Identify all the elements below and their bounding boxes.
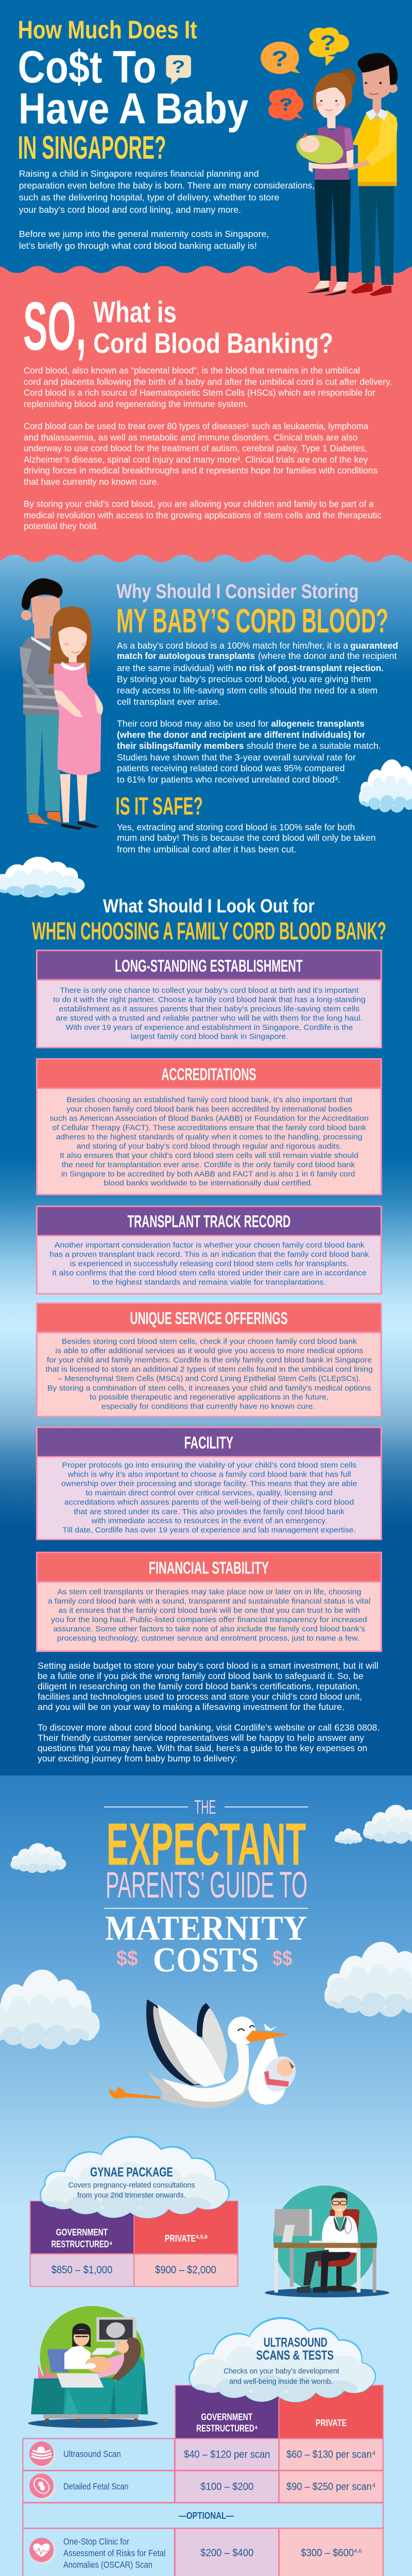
text block: transplants: are the same individual) with [117, 663, 233, 673]
table text: ultrasound: $40 – $120 per scan [184, 2448, 270, 2460]
panel: unique service offerings: to possible therapeutic and regenerative applications in the future, [90, 1393, 329, 1401]
panel: long-standing establishment [36, 950, 382, 1048]
table text: ultrasound: $60 – $130 per scan⁴ [286, 2448, 376, 2460]
panel: unique service offerings: especially for conditions that currently have no known cure. [101, 1402, 315, 1411]
panel: transplant track record [36, 1206, 382, 1295]
icon: orange question bubble: ? [271, 47, 288, 71]
table text: ultrasound: GOVERNMENT [201, 2412, 252, 2422]
panel: light blue wave gradient [0, 555, 412, 674]
title: expectant parents guide: THE [195, 1797, 216, 1818]
panel: long-standing establishment: to do it with the right partner. Choose a family cord blood bank that has a long-standing [53, 995, 366, 1004]
title [18, 16, 248, 166]
text block: transplants: match for autologous transplants [117, 651, 255, 661]
table text: ultrasound: $90 – $250 per scan⁴ [286, 2481, 376, 2492]
icon: cloud left [0, 857, 89, 899]
text block: transplants: Studies have shown that the 3-year overall survival rate for [117, 753, 356, 762]
icon: yellow question cloud [309, 27, 349, 66]
table text: ultrasound: —OPTIONAL— [179, 2510, 234, 2521]
title: expectant parents guide: COSTS [153, 1940, 259, 1979]
table text: ultrasound: 4,6 [354, 2548, 362, 2554]
text block: transplants: As a baby’s cord blood is a 100% match for him/her, it is a [117, 641, 348, 651]
panel: boxes long-standing, accreditations, track record [36, 950, 382, 1295]
icon: cloud [38, 2136, 237, 2221]
title: IN SINGAPORE? [18, 130, 166, 166]
table text: GOVERNMENT [56, 2227, 108, 2238]
intro text block: Raising a child in Singapore requires financial planning and [19, 169, 259, 179]
panel: unique service offerings: is able to offer additional services as it would give you access to more medical options [56, 1346, 363, 1355]
text block: closing paragraphs: and you will be on your way to making a lifesaving investment for the future. [38, 1702, 345, 1712]
title: expectant parents guide: $$ [116, 1946, 138, 1970]
table: ultrasound header and rows [22, 2385, 384, 2576]
panel: long-standing establishment: establishment as it assures parents that their baby’s precious life-saving stem cells [59, 1005, 359, 1013]
table text: 4,5,6 [196, 2234, 208, 2240]
panel: unique service offerings: – Mesenchymal Stem Cells (MSCs) and Cord Lining Epithelial Stem Cells (CLEpSCs). [58, 1374, 361, 1383]
text block: cord blood explanation: potential they hold. [24, 521, 98, 531]
panel: accreditations: the need for transplantation ever arise. Cordlife is the only family cord blood bank [62, 1160, 355, 1169]
intro text block [19, 169, 315, 251]
panel: unique service offerings: Besides storing cord blood stem cells, check if your chosen family cord blood bank [62, 1337, 357, 1346]
text block: closing paragraphs: your exciting journey from baby bump to delivery: [38, 1754, 237, 1764]
icon: beige question bubble [166, 55, 191, 84]
heading: ultrasound: and well-being inside the womb. [229, 2377, 333, 2385]
table text: ultrasound: One-Stop Clinic for [63, 2537, 129, 2547]
table text: $850 – $1,000 [51, 2264, 112, 2276]
text block: transplants: guaranteed [350, 641, 398, 651]
table text [51, 2227, 216, 2276]
panel: facility: Proper protocols go into ensuring the viability of your child’s cord blood stem cells [62, 1461, 356, 1469]
panel: accreditations [36, 1058, 382, 1195]
panel: financial stability: assurance. Some other factors to take note of also include the family cord blood bank’s [54, 1624, 365, 1633]
title: expectant parents guide: MATERNITY [105, 1909, 307, 1947]
panel: unique service offerings: By storing a combination of stem cells, it increases your child and family’s medical options [47, 1384, 371, 1392]
table text: $900 – $2,000 [155, 2264, 216, 2276]
text block: transplants: should there be a suitable match. [247, 741, 381, 751]
panel: accreditations: blood banks worldwide to be internationally dual certified. [104, 1179, 313, 1188]
illustration: ultrasound [28, 2306, 158, 2428]
panel: accreditations: in Singapore to be accredited by both AABB and FACT and is also 1 in 6 family cord [61, 1170, 355, 1178]
panel: accreditations: Besides choosing an established family cord blood bank, it’s also important that [66, 1095, 353, 1104]
text block: closing paragraphs [38, 1661, 380, 1764]
icon: beige question bubble: ? [171, 57, 185, 77]
panel: transplant track record: is experienced in successfully releasing cord blood stem cells for transplants. [70, 1259, 349, 1268]
icon: cloud [187, 2317, 384, 2405]
heading: what to look out for: What Should I Look Out for [103, 895, 315, 917]
panel: long-standing establishment: are stored with a trusted and reliable partner who will be with them for the long haul. [56, 1014, 363, 1022]
icon: clouds around title [0, 1805, 412, 2053]
icon: fetal scan [29, 2473, 55, 2500]
panel: financial stability [36, 1552, 382, 1652]
text block: transplants: allogeneic transplants [271, 719, 365, 729]
heading: ultrasound: ULTRASOUND [264, 2335, 328, 2350]
table text: ultrasound: $100 – $200 [200, 2481, 253, 2492]
text block: transplants: patients receiving related cord blood was 95% compared [117, 764, 345, 774]
panel: accreditations: such as American Association of Blood Banks (AABB) or Foundation for the Accreditation [49, 1114, 369, 1123]
section: why store cord blood [0, 578, 412, 945]
table text: ultrasound: Detailed Fetal Scan [63, 2482, 128, 2492]
text block: transplants: Their cord blood may also be used for [117, 719, 269, 729]
panel: facility [36, 1427, 382, 1540]
text block: cord blood explanation: that have currently no known cure. [24, 477, 159, 487]
panel: financial stability: FINANCIAL STABILITY [149, 1559, 269, 1578]
table text: ultrasound: $300 – $600 [301, 2547, 354, 2558]
panel: accreditations: your chosen family cord blood bank has been accredited by international bodies [66, 1105, 352, 1113]
text block: safety: Yes, extracting and storing cord blood is 100% safe for both [117, 822, 355, 833]
text block: safety: from the umbilical cord after it has been cut. [117, 844, 297, 855]
panel: gynae package [30, 2136, 238, 2287]
heading: why store [116, 581, 388, 640]
heading: So, what is cord blood banking [23, 288, 333, 364]
panel: transplant track record: Another important consideration factor is whether your chosen family cord blood bank [55, 1241, 365, 1249]
heading: what to look out for [32, 895, 386, 945]
heading: gynae: GYNAE PACKAGE [90, 2165, 173, 2180]
panel: accreditations: adheres to the highest standards of quality when it comes to the handling, processing [56, 1132, 363, 1141]
illustration: expecting couple [20, 578, 103, 830]
panel: facility: Till date, Cordlife has over 19 years of experience and lab management expertise. [62, 1526, 356, 1534]
panel: financial stability: a family cord blood bank with a sound, transparent and sustainable financial status is vital [48, 1597, 370, 1605]
text block: cord blood explanation [24, 366, 392, 531]
heading: ultrasound: Checks on your baby's development [224, 2367, 339, 2375]
panel: facility: ownership over their processing and storage facility. This means that they are able [61, 1479, 357, 1488]
panel: facility: accreditations which assures parents of the well-being of their child’s cord blood [64, 1498, 354, 1506]
heading: So, what is cord blood banking: SO, [23, 288, 86, 364]
panel: unique service offerings [36, 1302, 382, 1417]
panel: accreditations: of Cellular Therapy (FACT). These accreditations ensure that the family cord blood bank [53, 1123, 367, 1132]
text block: transplants: to 61% for patients who received unrelated cord blood³. [117, 775, 340, 785]
panel: financial stability: As stem cell transplants or therapies may take place now or later on in life, choosing [57, 1587, 362, 1596]
intro text block: let’s briefly go through what cord blood banking actually is! [19, 241, 257, 251]
panel: transplant track record: has a proven transplant track record. This is an indication that the family cord blood bank [49, 1250, 369, 1259]
panel: facility: which is why it’s also important to choose a family cord blood bank that has full [67, 1470, 351, 1479]
panel: accreditations: and storing of your baby’s cord blood through regular and rigorous audits. [76, 1142, 342, 1150]
icon: red question cloud [268, 88, 303, 121]
panel: financial stability: you for the long haul. Public-listed companies offer financial transparency for increased [51, 1615, 367, 1624]
panel: coral wave background [0, 266, 412, 568]
icon: yellow question cloud: ? [320, 31, 336, 55]
table text: ultrasound: Ultrasound Scan [63, 2449, 121, 2459]
icon: red question cloud: ? [279, 94, 293, 114]
title: expectant parents guide: $$ [272, 1946, 293, 1970]
intro text block: preparation even before the baby is born. There are many considerations, [19, 181, 315, 191]
panel: transplant track record: It also confirms that the cord blood stem cells stored under their care are in accordance [52, 1268, 367, 1277]
panel: facility: with immediate access to resources in the event of an emergency. [91, 1516, 327, 1525]
title: Have A Baby [19, 84, 248, 133]
title: Co$t To [18, 42, 157, 92]
table text: ultrasound [63, 2412, 376, 2576]
table text: PRIVATE [165, 2233, 196, 2244]
panel: long-standing establishment: largest family cord blood bank in Singapore. [131, 1032, 288, 1041]
title: How Much Does It [18, 16, 197, 44]
hero section [18, 16, 398, 329]
text block: safety [117, 822, 376, 855]
heading: gynae: Covers pregnancy-related consultations [68, 2181, 195, 2190]
panel: facility: to maintain direct control over critical services, quality, licensing and [85, 1488, 333, 1497]
illustration: woman holding baby [291, 69, 356, 295]
icon: orange question bubble [261, 42, 300, 74]
icon: cloud right [358, 759, 412, 815]
title: expectant parents guide [104, 1797, 308, 1979]
section: ultrasound scans and tests [22, 2306, 384, 2576]
text block: transplants: cell transplant ever arise. [117, 697, 221, 707]
panel: boxes unique services, facility, financial stability [36, 1302, 382, 1652]
intro text block: your baby’s cord blood and cord lining, and many more. [19, 205, 241, 215]
table text: ultrasound: $200 – $400 [200, 2547, 253, 2558]
panel: long-standing establishment: There is only one chance to collect your baby’s cord blood at birth and it’s important [60, 986, 359, 994]
panel: accreditations: It also ensures that your child’s cord blood stem cells will still remain viable should [60, 1151, 358, 1160]
table: gynae costs [30, 2200, 238, 2287]
table text: RESTRUCTURED⁴ [51, 2239, 112, 2249]
text block: transplants [117, 641, 398, 785]
illustration: doctor at desk [265, 2185, 389, 2297]
illustration: stork carrying baby [109, 1999, 300, 2108]
icon: ultrasound scan [29, 2442, 55, 2468]
table text: ultrasound: Assessment of Risks for Fetal [63, 2549, 165, 2558]
heading: gynae [68, 2165, 195, 2199]
heading: gynae: from your 2nd trimester onwards. [77, 2191, 186, 2199]
panel: facility: that are stored under its care. This also provides the family cord blood bank [74, 1507, 345, 1516]
icon: heart pulse [29, 2538, 55, 2564]
heading: So: What is [93, 295, 177, 329]
text block: transplants: their siblings/family members [117, 741, 244, 751]
text block: closing paragraphs: diligent in researching on the family cord blood bank’s certifications, reputation, [38, 1682, 360, 1691]
heading: ultrasound: SCANS & TESTS [256, 2348, 334, 2363]
panel: transplant track record: to the highest standards and remains viable for transplantations. [93, 1278, 326, 1286]
panel: financial stability: as it ensures that the family cord blood bank will be one that you can trust to be with [58, 1606, 360, 1615]
panel: financial stability: processing technology, customer service and enrolment process, just to name a few. [57, 1634, 359, 1642]
section: what is cord blood banking [23, 288, 392, 640]
panel: long-standing establishment: With over 19 years of experience and establishment in Singapore, Cordlife is the [66, 1023, 353, 1031]
table text: ultrasound: PRIVATE [316, 2417, 347, 2428]
intro text block: such as the delivering hospital, type of delivery, whether to store [19, 193, 279, 202]
section: closing text and guide title [0, 1661, 412, 2053]
illustration: man [341, 53, 398, 296]
panel: accreditations: ACCREDITATIONS [161, 1065, 256, 1084]
table text: ultrasound: Anomalies (OSCAR) Scan [63, 2560, 152, 2570]
intro text block: Before we jump into the general maternity costs in Singapore, [19, 229, 269, 239]
table text: ultrasound: RESTRUCTURED⁴ [196, 2423, 258, 2434]
section: stork and gynae [30, 1999, 389, 2297]
panel: facility: FACILITY [184, 1433, 233, 1452]
text block: cord blood explanation: replenishing blood and regenerating the immune system. [24, 399, 248, 409]
heading: ultrasound [224, 2335, 339, 2385]
section: why store cord blood: IS IT SAFE? [115, 792, 203, 820]
